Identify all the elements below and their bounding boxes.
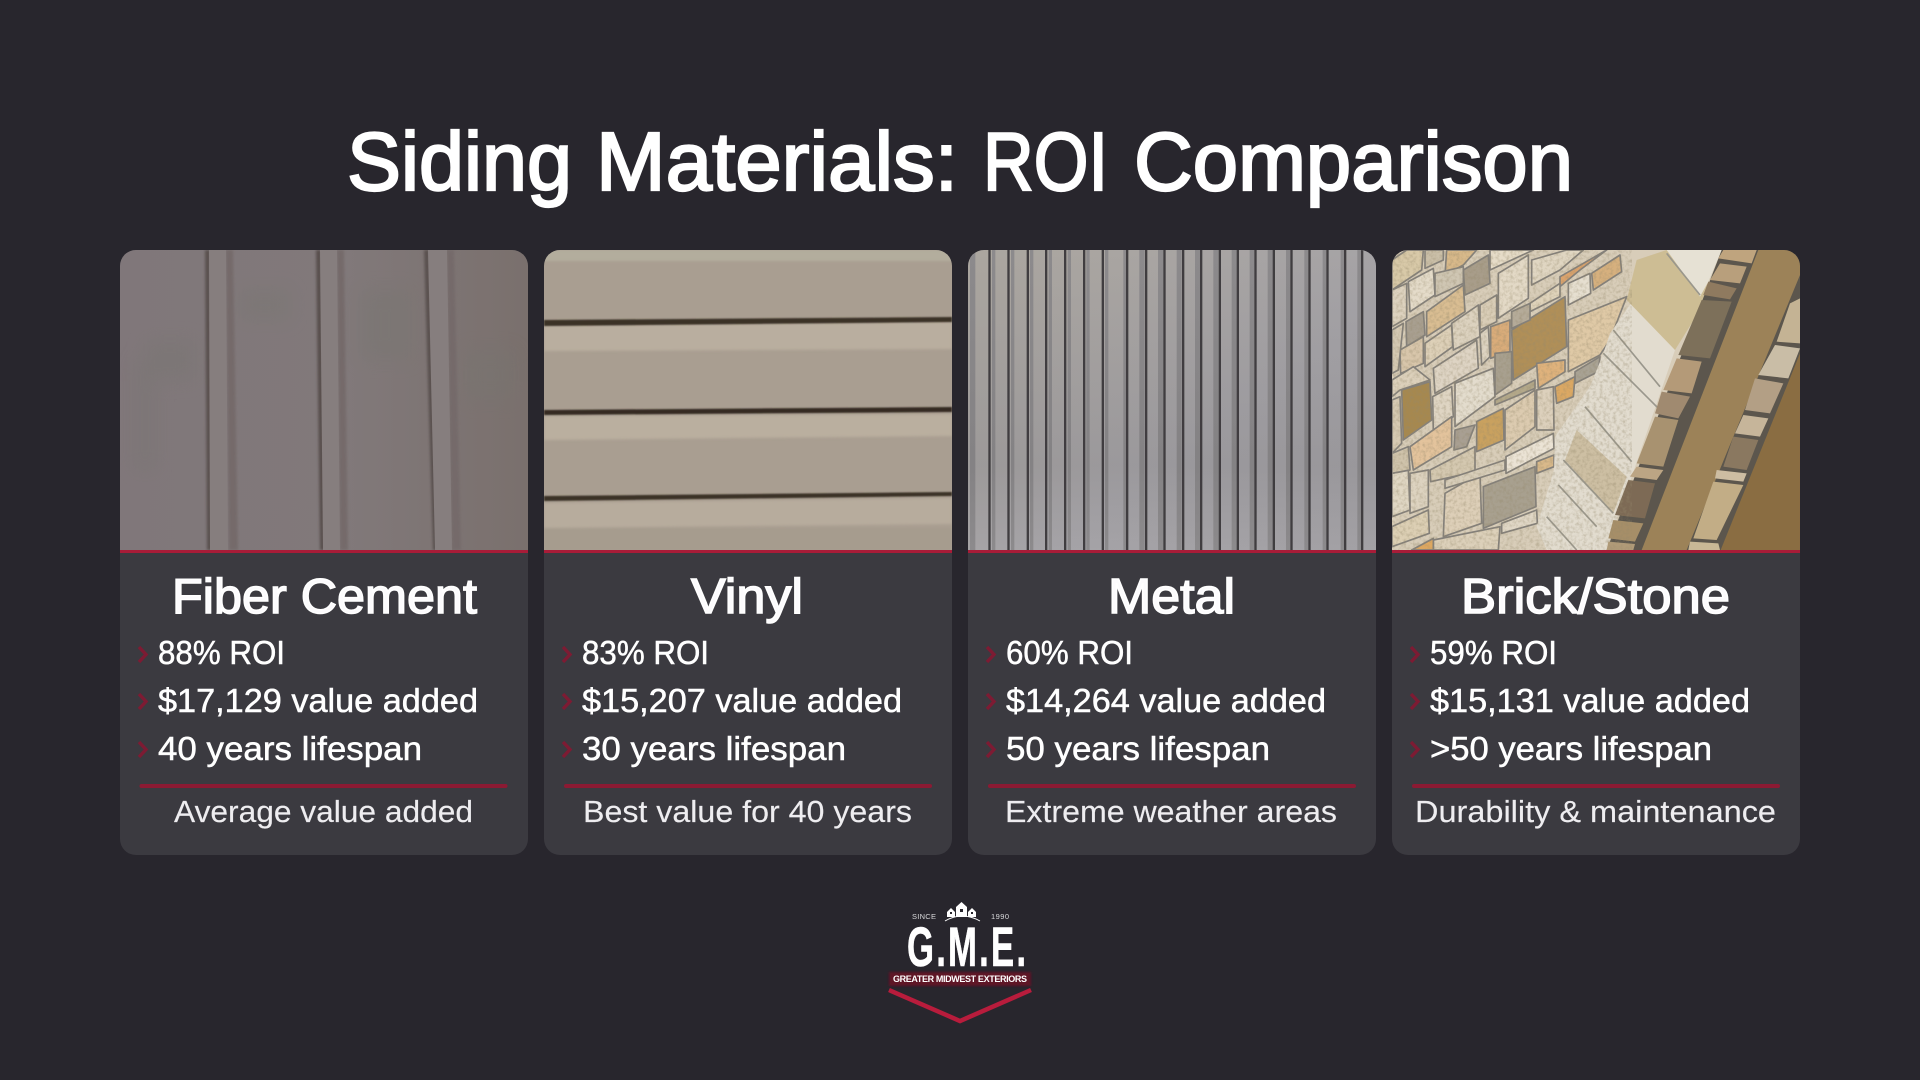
- title: Materials:: [596, 115, 958, 208]
- banner: [889, 972, 1031, 986]
- image: fiber cement siding: [120, 250, 528, 550]
- panel: vinyl: [544, 250, 952, 855]
- bullets: $15,131 value added: [1430, 682, 1750, 719]
- stone texture: [1392, 250, 1632, 550]
- bullets: 40 years lifespan: [158, 730, 422, 767]
- bullets: $17,129 value added: [158, 682, 478, 719]
- accent line: [120, 550, 528, 553]
- bullets: 30 years lifespan: [582, 730, 846, 767]
- image: brick and stone wall: [1392, 250, 1800, 550]
- heading: Metal: [1108, 570, 1235, 624]
- bullets: 60% ROI: [1006, 634, 1133, 671]
- heading: Vinyl: [691, 570, 803, 624]
- accent line: [544, 550, 952, 553]
- panel: metal: [968, 250, 1376, 855]
- bullets: 59% ROI: [1430, 634, 1557, 671]
- image: metal siding: [968, 250, 1376, 550]
- image: vinyl siding: [544, 250, 952, 550]
- title: Comparison: [1134, 115, 1573, 208]
- best for note: Extreme weather areas: [1005, 794, 1337, 829]
- heading: Brick/Stone: [1461, 570, 1730, 624]
- bullets: >50 years lifespan: [1430, 730, 1712, 767]
- since label: SINCE: [912, 912, 936, 921]
- bullets: [1411, 634, 1750, 767]
- company name: GREATER MIDWEST EXTERIORS: [893, 974, 1027, 984]
- wordmark: G.M.E.: [907, 916, 1026, 978]
- best for note: Best value for 40 years: [583, 794, 912, 829]
- bullets: $15,207 value added: [582, 682, 902, 719]
- founded year: 1990: [991, 912, 1009, 921]
- heading: Fiber Cement: [172, 570, 477, 624]
- bullets: [987, 634, 1326, 767]
- bullets: 88% ROI: [158, 634, 285, 671]
- accent line: [1392, 550, 1800, 553]
- bullets: [139, 634, 478, 767]
- bullets: 50 years lifespan: [1006, 730, 1270, 767]
- title: Siding: [347, 115, 572, 208]
- bullets: 83% ROI: [582, 634, 709, 671]
- accent line: [968, 550, 1376, 553]
- icon: houses: [945, 902, 980, 921]
- panel: brick and stone: [1392, 250, 1800, 855]
- title: ROI: [983, 115, 1108, 208]
- bullets: $14,264 value added: [1006, 682, 1326, 719]
- panel: fiber cement: [120, 250, 528, 855]
- logo: G.M.E. Greater Midwest Exteriors: [889, 902, 1031, 1021]
- best for note: Durability & maintenance: [1415, 794, 1776, 829]
- bullets: [563, 634, 902, 767]
- title: [347, 115, 1573, 208]
- best for note: Average value added: [174, 794, 473, 829]
- chevron: [889, 990, 1031, 1021]
